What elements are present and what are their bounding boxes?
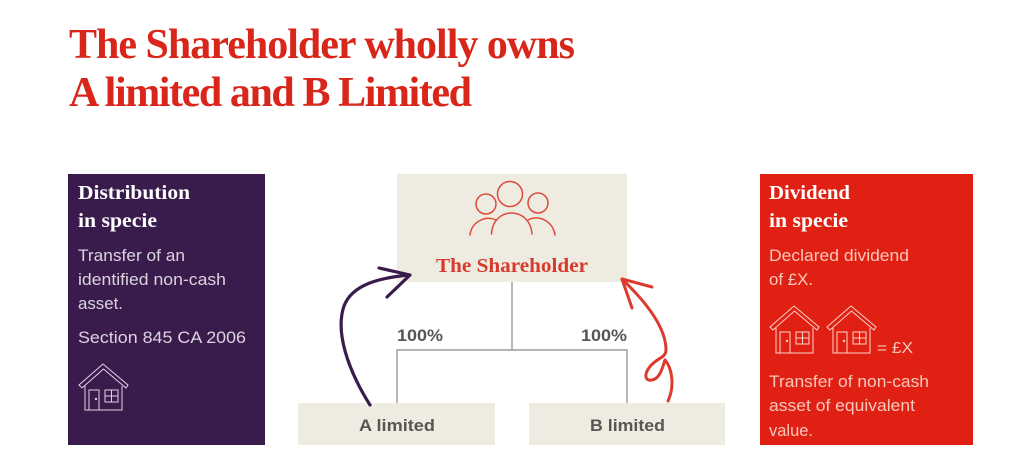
text: distribution description: asset. <box>78 294 123 313</box>
text: distribution description: Section 845 CA 2006 <box>78 328 246 347</box>
heading: distribution in specie: Distribution <box>78 182 190 204</box>
text: equals x: = £X <box>877 340 913 357</box>
box: b limited: B limited <box>590 416 665 435</box>
icon: group of people <box>470 182 555 235</box>
panel: distribution in specie <box>68 174 265 445</box>
text: distribution description <box>78 246 246 347</box>
box: b limited <box>529 403 725 445</box>
heading: dividend in specie <box>769 182 850 232</box>
icon: house <box>79 364 128 410</box>
text: transfer description: value. <box>769 421 813 440</box>
text: dividend description: of £X. <box>769 270 813 289</box>
icon: house two <box>827 306 876 353</box>
icon: house one <box>770 306 819 353</box>
text: dividend description: Declared dividend <box>769 246 909 265</box>
text: transfer description: asset of equivalent <box>769 396 915 415</box>
arrow: b limited to shareholder <box>622 279 672 401</box>
arrow: a limited to shareholder <box>341 268 410 405</box>
title: A limited and B Limited <box>69 70 472 116</box>
text: distribution description: Transfer of an <box>78 246 185 265</box>
heading: distribution in specie <box>78 182 190 232</box>
title: The Shareholder wholly owns <box>69 22 575 68</box>
panel: the shareholder <box>397 174 627 282</box>
label: 100% right: 100% <box>581 327 627 345</box>
heading: distribution in specie: in specie <box>78 210 157 232</box>
title <box>69 22 575 116</box>
label: the shareholder: The Shareholder <box>436 255 588 277</box>
text: distribution description: identified non-cash <box>78 270 226 289</box>
text: transfer description: Transfer of non-cash <box>769 372 929 391</box>
heading: dividend in specie: in specie <box>769 210 848 232</box>
panel: dividend in specie <box>760 174 973 445</box>
text: dividend description <box>769 246 909 289</box>
label: 100% left: 100% <box>397 327 443 345</box>
box: a limited <box>298 403 495 445</box>
org chart connector lines <box>397 282 627 403</box>
heading: dividend in specie: Dividend <box>769 182 850 204</box>
text: transfer description <box>769 372 929 440</box>
box: a limited: A limited <box>359 416 435 435</box>
